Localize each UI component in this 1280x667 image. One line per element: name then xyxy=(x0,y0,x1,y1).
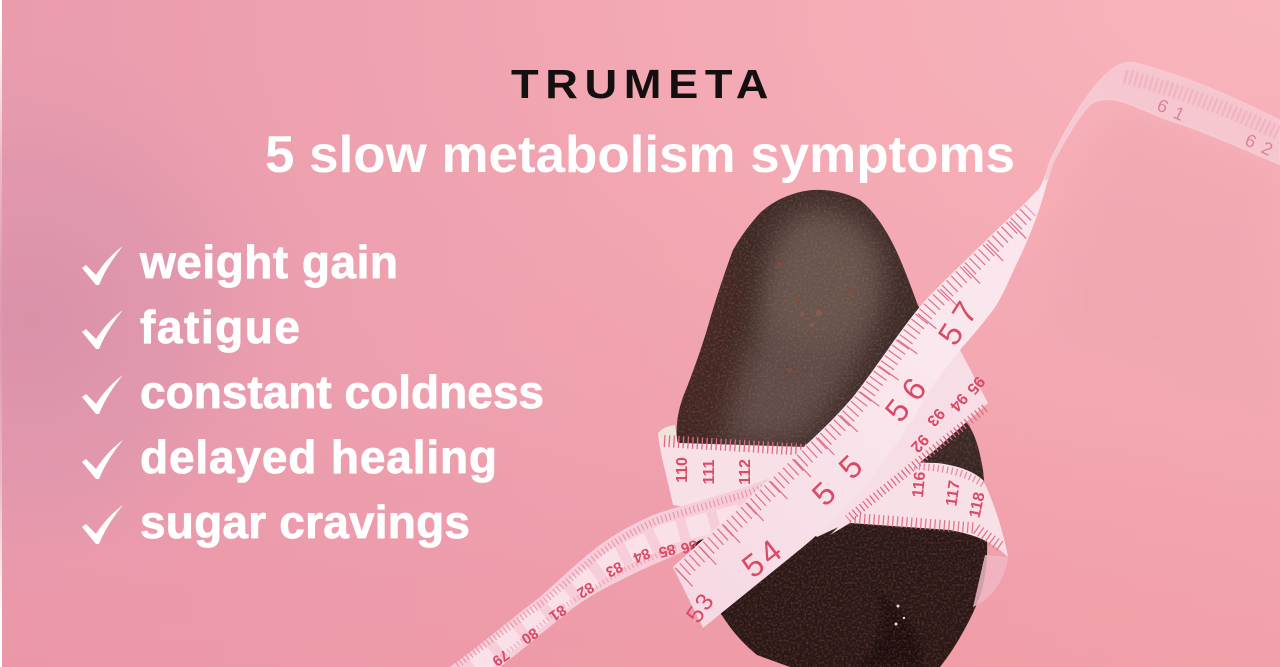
second strip number labels xyxy=(907,373,988,455)
avocado xyxy=(676,190,988,667)
symptom checklist xyxy=(82,236,544,548)
far end tape number labels: 61 xyxy=(1154,95,1195,128)
measuring tape: main strip xyxy=(673,62,1280,628)
band number labels: 110 xyxy=(674,457,691,483)
item: weight gain: weight gain xyxy=(139,236,398,288)
brand name: TRUMETA xyxy=(511,61,775,107)
tail number labels: 83 xyxy=(603,558,625,580)
measuring tape: tail to lower left xyxy=(450,470,800,667)
band number labels: 117 xyxy=(943,479,964,507)
band number labels: 111 xyxy=(701,459,718,484)
pale number panels on tail xyxy=(475,515,740,667)
tail number labels: 84 xyxy=(630,544,653,566)
measuring tape: second diagonal strip xyxy=(800,350,988,537)
band number labels: 118 xyxy=(967,491,989,519)
item: sugar cravings: sugar cravings xyxy=(140,496,470,548)
second strip number labels: 95 xyxy=(963,373,988,397)
tail number labels: 80 xyxy=(518,624,541,647)
measuring tape: horizontal band around avocado xyxy=(658,425,1008,607)
tail number labels: 82 xyxy=(574,578,597,601)
main strip number labels xyxy=(681,289,989,628)
main strip number labels: 56 xyxy=(878,364,939,428)
tail number labels: 85 xyxy=(657,540,677,561)
band number labels: 116 xyxy=(910,471,929,498)
main strip number labels: 53 xyxy=(681,587,721,628)
fold shadow at band end xyxy=(973,555,1008,607)
main strip number labels: 55 xyxy=(805,434,884,513)
second strip number labels: 93 xyxy=(923,405,948,429)
tail number labels xyxy=(489,536,699,667)
item: fatigue: fatigue xyxy=(140,301,300,353)
tail number labels: 81 xyxy=(546,601,569,624)
band number labels: 112 xyxy=(737,459,754,485)
main strip number labels: 54 xyxy=(735,530,791,585)
short tape ticks xyxy=(680,210,1030,574)
tail number labels: 86 xyxy=(679,536,699,557)
heading: 5 slow metabolism symptoms xyxy=(265,126,1015,184)
item: delayed healing: delayed healing xyxy=(140,431,497,483)
second strip number labels: 94 xyxy=(946,390,971,414)
main strip number labels: 57 xyxy=(931,289,989,351)
faded far end of tape xyxy=(1044,62,1280,180)
band number labels xyxy=(674,457,989,519)
item: constant coldness: constant coldness xyxy=(140,366,544,418)
far end tape number labels xyxy=(1154,95,1280,163)
long tape ticks xyxy=(684,222,1026,578)
second strip number labels: 92 xyxy=(907,431,932,455)
